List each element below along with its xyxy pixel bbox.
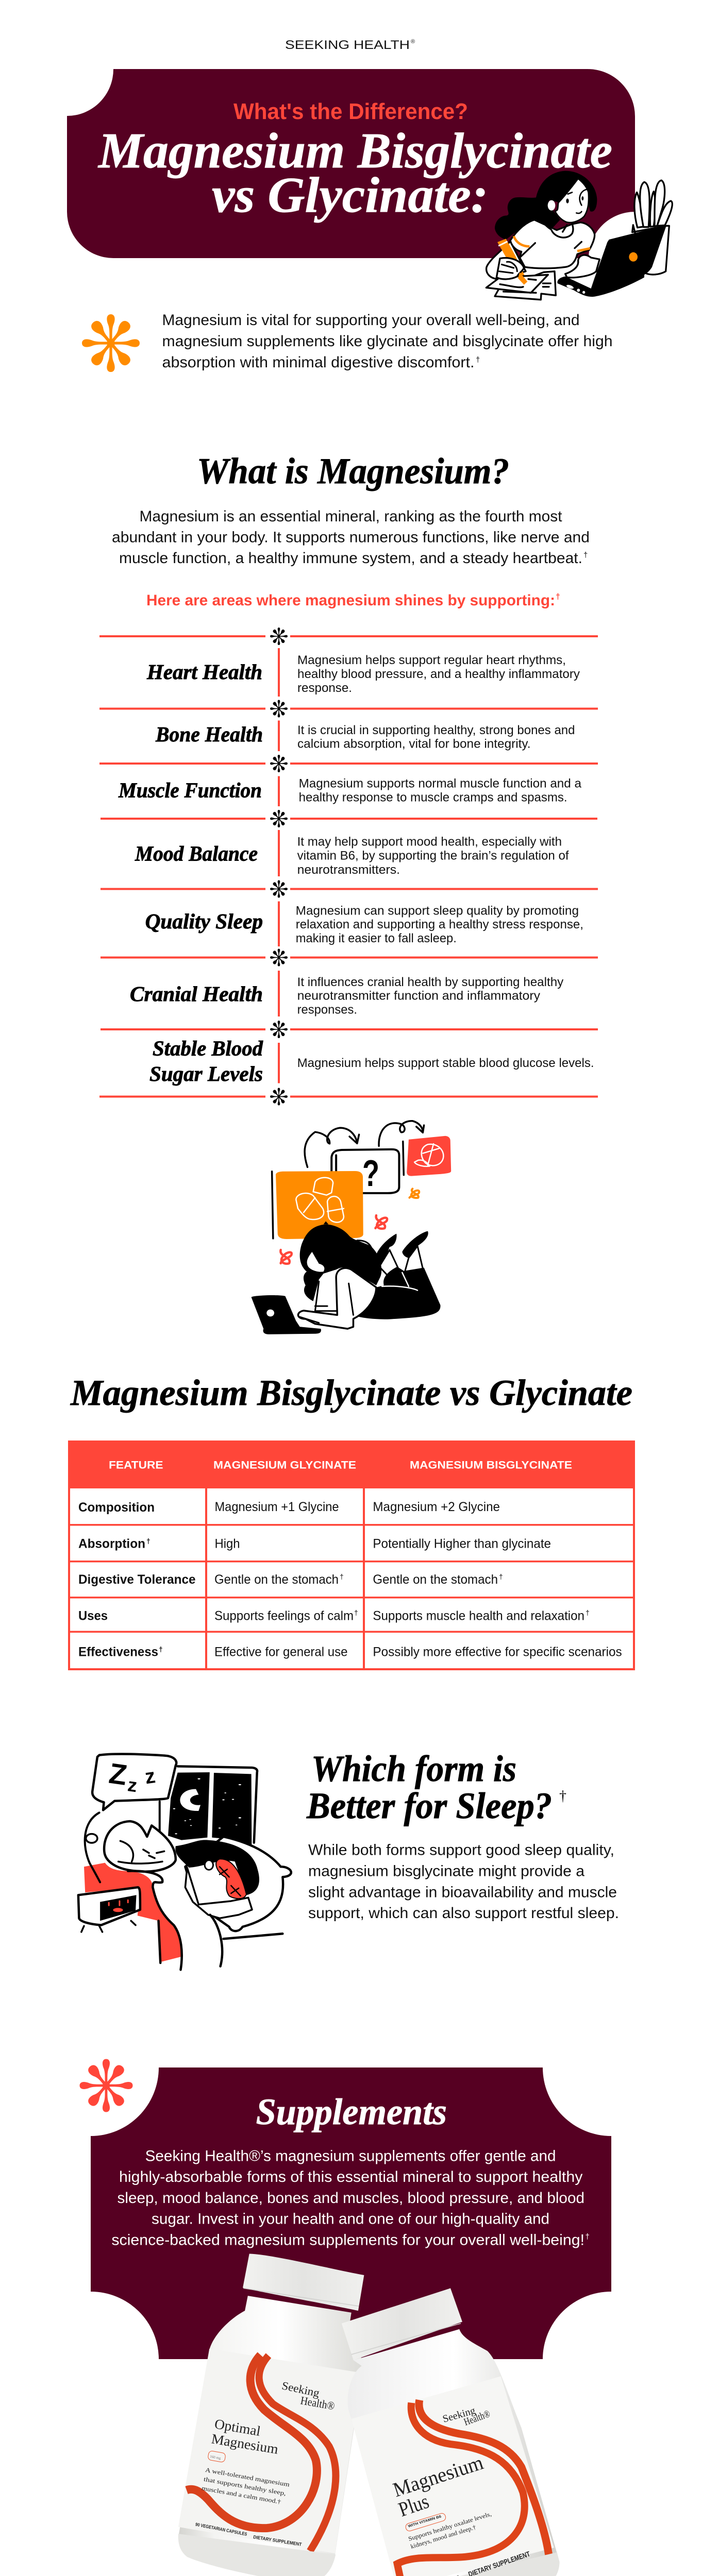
row: heart health: response.	[297, 681, 352, 695]
bottle: optimal magnesium: Seeking	[281, 2379, 321, 2399]
table rows: †	[340, 1572, 344, 1581]
heading: what is magnesium: What is Magnesium?	[197, 451, 509, 492]
row: quality sleep: Quality Sleep	[145, 909, 263, 933]
table rows: High	[214, 1536, 240, 1551]
row: mood balance: vitamin B6, by supporting the brain’s regulation of	[297, 849, 569, 863]
row: quality sleep	[145, 904, 583, 945]
bottle: magnesium plus	[342, 2288, 559, 2576]
paragraph: sleep: slight advantage in bioavailability and muscle	[308, 1884, 617, 1901]
text block: magnesium description	[112, 508, 590, 567]
text block: magnesium description: muscle function, a healthy immune system, and a steady heartbeat.	[119, 550, 582, 567]
table rows: Magnesium +2 Glycine	[373, 1500, 500, 1514]
row: muscle function	[118, 777, 582, 805]
text block: magnesium description: abundant in your body. It supports numerous functions, like nerve and	[112, 529, 590, 546]
heading: sleep	[306, 1748, 566, 1826]
row: muscle function: Magnesium supports normal muscle function and a	[299, 777, 582, 791]
table rows: †	[159, 1645, 163, 1653]
row: muscle function: healthy response to muscle cramps and spasms.	[299, 791, 567, 805]
illustration: sleeping person with cat: z	[126, 1774, 139, 1796]
row: heart health: healthy blood pressure, and a healthy inflammatory	[297, 667, 580, 681]
illustration: woman comparing supplements	[252, 1121, 451, 1334]
row: cranial health	[130, 975, 563, 1016]
illustration: sleeping person with cat: Z	[107, 1757, 129, 1791]
row: heart health	[146, 653, 580, 695]
panel: hero title	[67, 69, 635, 258]
bottle: optimal magnesium: Optimal	[213, 2416, 262, 2439]
illustration: woman comparing supplements: ?	[362, 1153, 379, 1194]
bottle: magnesium plus: Plus	[395, 2489, 432, 2521]
bottle: magnesium plus: Magnesium	[390, 2451, 486, 2501]
intro paragraph: †	[476, 355, 480, 364]
bottle: magnesium plus: Supports healthy oxalate levels,	[407, 2510, 492, 2543]
row: mood balance: Mood Balance	[135, 842, 258, 866]
row: muscle function: Muscle Function	[118, 778, 262, 802]
brand wordmark: ®	[411, 39, 415, 45]
row: mood balance: It may help support mood health, especially with	[297, 835, 562, 849]
intro paragraph: absorption with minimal digestive discomfort.	[162, 354, 474, 371]
bottle: optimal magnesium: Health®	[299, 2394, 336, 2413]
paragraph: supplements: sleep, mood balance, bones and muscles, blood pressure, and blood	[118, 2190, 584, 2207]
text block: magnesium description: Magnesium is an essential mineral, ranking as the fourth most	[139, 508, 562, 525]
table header: MAGNESIUM GLYCINATE	[213, 1460, 356, 1471]
heading: supplements: Supplements	[256, 2091, 447, 2132]
bottle: magnesium plus: Seeking	[441, 2405, 477, 2425]
table header	[109, 1460, 572, 1471]
bottle: optimal magnesium: muscles and a calm mood.†	[201, 2484, 281, 2505]
brand wordmark: SEEKING HEALTH	[285, 38, 410, 52]
main title: vs Glycinate:	[212, 167, 488, 223]
bottle: optimal magnesium: Magnesium	[210, 2431, 279, 2457]
row: bone health: It is crucial in supporting healthy, strong bones and	[297, 723, 575, 737]
bottle: magnesium plus: WITH VITAMIN B6	[408, 2515, 442, 2529]
callout: intro text	[82, 312, 612, 372]
row: quality sleep: Magnesium can support sleep quality by promoting	[296, 904, 579, 918]
heading: sleep: †	[559, 1788, 566, 1804]
table rows	[78, 1500, 622, 1659]
paragraph: supplements	[111, 2147, 590, 2248]
table rows: Effectiveness	[78, 1645, 158, 1659]
heading: sleep: Better for Sleep?	[306, 1785, 552, 1826]
row: bone health: calcium absorption, vital for bone integrity.	[297, 737, 531, 751]
table rows: †	[499, 1572, 503, 1581]
table rows: Absorption	[78, 1536, 145, 1551]
paragraph: sleep: support, which can also support restful sleep.	[308, 1905, 619, 1922]
table rows: †	[146, 1537, 151, 1545]
bottle: optimal magnesium: DIETARY SUPPLEMENT	[253, 2534, 303, 2547]
illustration: sleeping person with cat: z	[143, 1765, 157, 1788]
illustration: woman writing at laptop	[486, 171, 672, 300]
table header: FEATURE	[109, 1460, 163, 1471]
paragraph: sleep: magnesium bisglycinate might provide a	[308, 1863, 584, 1880]
illustration: sleeping person with cat	[78, 1754, 291, 1970]
row: cranial health: It influences cranial health by supporting healthy	[297, 975, 563, 989]
paragraph: supplements: sugar. Invest in your health and one of our high-quality and	[152, 2211, 549, 2228]
eyebrow heading: What's the Difference?	[233, 99, 468, 124]
table header: MAGNESIUM BISGLYCINATE	[410, 1460, 572, 1471]
paragraph: supplements: science-backed magnesium supplements for your overall well-being!	[111, 2231, 584, 2248]
icon: orange star	[82, 314, 140, 372]
table rows: Supports muscle health and relaxation	[373, 1608, 584, 1623]
subheading: areas: Here are areas where magnesium shines by supporting:	[146, 592, 555, 609]
table rows: Uses	[78, 1608, 108, 1623]
bottle: magnesium plus: Health®	[462, 2408, 492, 2428]
panel: benefit rows	[99, 628, 598, 1106]
bottle: optimal magnesium: that supports healthy sleep,	[203, 2476, 287, 2497]
bottle: optimal magnesium	[178, 2253, 364, 2576]
intro paragraph: magnesium supplements like glycinate and bisglycinate offer high	[162, 333, 612, 350]
row: bone health	[155, 722, 575, 751]
row: stable blood sugar levels: Stable Blood	[153, 1037, 263, 1060]
row: heart health: Magnesium helps support regular heart rhythms,	[297, 653, 566, 667]
bottle: optimal magnesium: 160 mg	[210, 2454, 221, 2461]
table rows: Gentle on the stomach	[214, 1572, 339, 1587]
text block: which form is better for sleep	[306, 1748, 619, 1922]
row: bone health: Bone Health	[155, 722, 263, 746]
table rows: Supports feelings of calm	[214, 1608, 354, 1623]
row: cranial health: responses.	[297, 1003, 357, 1016]
paragraph: supplements: Seeking Health®’s magnesium supplements offer gentle and	[145, 2147, 556, 2164]
table rows: Gentle on the stomach	[373, 1572, 498, 1587]
row: stable blood sugar levels: Magnesium helps support stable blood glucose levels.	[297, 1056, 594, 1070]
table rows: Possibly more effective for specific scenarios	[373, 1645, 622, 1659]
intro paragraph: Magnesium is vital for supporting your overall well-being, and	[162, 312, 579, 329]
row: mood balance: neurotransmitters.	[297, 863, 400, 877]
bottle: optimal magnesium: 90 VEGETARIAN CAPSULES	[195, 2522, 247, 2537]
subheading: areas: †	[556, 592, 560, 601]
bottle: optimal magnesium: A well-tolerated magnesium	[205, 2466, 291, 2488]
row: cranial health: neurotransmitter function and inflammatory	[297, 989, 540, 1003]
table rows: Composition	[78, 1500, 155, 1515]
comparison table	[68, 1440, 635, 1669]
intro paragraph	[162, 312, 612, 371]
table rows: Digestive Tolerance	[78, 1572, 196, 1587]
row: stable blood sugar levels	[149, 1037, 594, 1086]
main title	[97, 123, 612, 223]
paragraph: supplements: highly-absorbable forms of this essential mineral to support healthy	[119, 2168, 582, 2185]
icon: red star	[79, 2059, 133, 2112]
row: quality sleep: making it easier to fall asleep.	[296, 931, 457, 945]
table rows: Effective for general use	[214, 1645, 347, 1659]
row: cranial health: Cranial Health	[130, 982, 263, 1006]
row: mood balance	[135, 835, 569, 877]
row: heart health: Heart Health	[146, 660, 262, 684]
table rows: †	[586, 1608, 590, 1617]
row: quality sleep: relaxation and supporting a healthy stress response,	[296, 918, 583, 931]
heading: sleep: Which form is	[311, 1748, 516, 1789]
table rows: †	[354, 1608, 358, 1617]
panel: supplements	[91, 2067, 611, 2359]
row: stable blood sugar levels: Sugar Levels	[149, 1062, 263, 1086]
paragraph: sleep: While both forms support good sleep quality,	[308, 1842, 614, 1859]
paragraph: sleep	[308, 1842, 619, 1922]
paragraph: supplements: †	[586, 2232, 590, 2241]
bottle: magnesium plus: kidneys, mood and sleep.†	[410, 2523, 477, 2550]
text block: magnesium description: †	[583, 551, 588, 560]
table rows: Potentially Higher than glycinate	[373, 1536, 551, 1551]
heading: comparison: Magnesium Bisglycinate vs Glycinate	[70, 1373, 632, 1413]
table rows: Magnesium +1 Glycine	[214, 1500, 339, 1514]
main title: Magnesium Bisglycinate	[97, 123, 612, 179]
